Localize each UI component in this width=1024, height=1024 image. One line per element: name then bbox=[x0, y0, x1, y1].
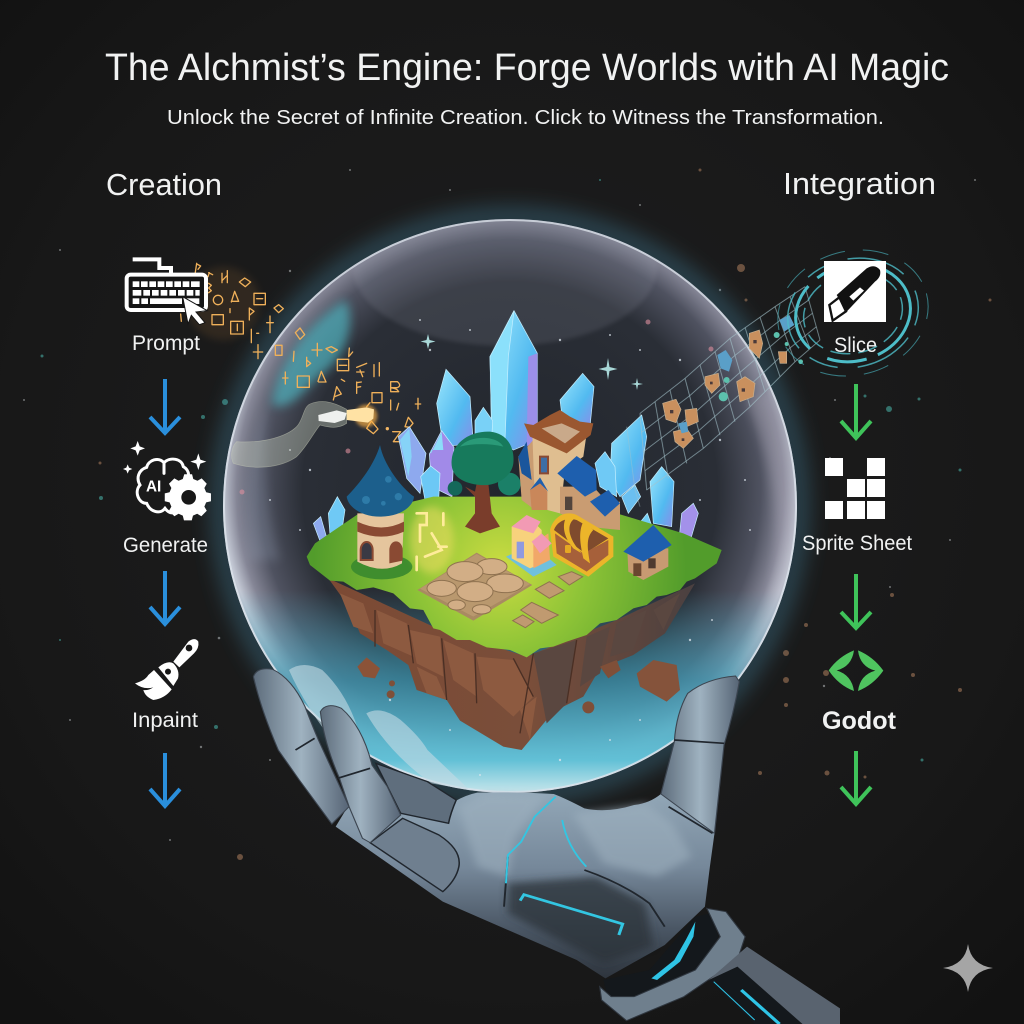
label: inpaint: Inpaint bbox=[132, 709, 198, 732]
icon: AI brain with gear: AI bbox=[146, 478, 161, 495]
icon: slice cutter bbox=[824, 261, 886, 322]
joint seams bbox=[295, 738, 724, 927]
far right crystals bbox=[639, 467, 698, 547]
wrist joint bbox=[604, 913, 718, 997]
cyan circuit lines bbox=[506, 797, 623, 935]
left edge crystals bbox=[313, 497, 353, 550]
castle bbox=[518, 410, 620, 530]
wrist ring bbox=[600, 908, 745, 1021]
arrow: inpaint onward bbox=[150, 753, 180, 806]
right rear crystal bbox=[560, 373, 594, 427]
crystals behind buildings bbox=[490, 311, 647, 497]
left column: creation flow bbox=[123, 259, 211, 806]
finger: lower segments bbox=[370, 763, 459, 892]
rune stream from keyboard to ghost hand bbox=[181, 263, 382, 434]
arrow: generate to inpaint bbox=[150, 571, 180, 624]
floating island bbox=[307, 311, 722, 750]
glass sphere bbox=[220, 190, 800, 800]
tree bbox=[448, 432, 521, 533]
portal rings bbox=[764, 233, 942, 393]
sphere interior effects bbox=[220, 190, 800, 800]
arrow: slice to sprite sheet bbox=[841, 384, 871, 438]
title: The Alchmist’s Engine: Forge Worlds with AI Magic bbox=[105, 47, 949, 89]
sphere outer glow bbox=[222, 218, 798, 794]
corner sparkle mark bbox=[943, 944, 993, 992]
palm bbox=[336, 767, 714, 978]
arrow: sprite sheet to godot bbox=[841, 574, 871, 628]
robotic hand bbox=[253, 665, 840, 1024]
pink house bbox=[506, 515, 557, 577]
cyan wrist glow bbox=[651, 922, 695, 980]
arrow: godot onward bbox=[841, 751, 871, 804]
background star dust bbox=[23, 168, 992, 860]
icon: sprite sheet grid bbox=[825, 458, 885, 519]
finger: second bbox=[320, 706, 401, 843]
palm highlight bbox=[458, 793, 692, 877]
left tall crystal bbox=[437, 369, 473, 447]
small blue house bbox=[623, 525, 672, 580]
sparkle stars bbox=[420, 334, 643, 390]
label: slice: Slice bbox=[834, 334, 877, 357]
glowing brush tip bbox=[347, 405, 377, 427]
sprite fragments bbox=[663, 315, 803, 448]
stepping stones bbox=[513, 572, 583, 628]
arrow: prompt to generate bbox=[150, 379, 180, 433]
rear translucent fingers bbox=[289, 665, 470, 790]
central tall crystal bbox=[490, 311, 537, 450]
right column: integration flow bbox=[764, 233, 942, 804]
label: godot: Godot bbox=[822, 707, 897, 735]
forearm cyan lights bbox=[714, 982, 780, 1024]
left cluster crystals bbox=[398, 427, 454, 507]
ghost hand painting runes bbox=[232, 401, 377, 467]
runes past the brush bbox=[386, 382, 421, 442]
heading: creation: Creation bbox=[106, 167, 222, 202]
palm shadow bbox=[508, 877, 653, 963]
label: prompt: Prompt bbox=[132, 332, 200, 355]
stone plaza bbox=[417, 553, 532, 621]
forearm dark channel bbox=[709, 967, 802, 1024]
magic sparks bbox=[410, 507, 453, 573]
finger: far left bbox=[253, 669, 349, 824]
treasure chest bbox=[550, 513, 613, 577]
icon: AI brain with gear bbox=[123, 441, 211, 520]
forearm bbox=[709, 947, 840, 1024]
icon: keyboard with cursor bbox=[127, 259, 207, 325]
right big crystal bbox=[595, 415, 647, 513]
thumb bbox=[661, 676, 739, 833]
label: sprite sheet: Sprite Sheet bbox=[802, 532, 912, 555]
grass top bbox=[307, 497, 722, 657]
subtitle: Unlock the Secret of Infinite Creation. Click to Witness the Transformation. bbox=[167, 106, 884, 129]
wireframe mesh stream bbox=[627, 287, 820, 507]
wizard tower bbox=[347, 445, 414, 579]
floating rocks bbox=[357, 657, 680, 713]
small rear crystal bbox=[475, 407, 493, 440]
rock underside bbox=[328, 578, 695, 750]
icon: godot bbox=[829, 650, 883, 691]
sphere body bbox=[223, 219, 797, 793]
label: generate: Generate bbox=[123, 534, 208, 557]
heading: integration: Integration bbox=[783, 166, 936, 201]
sphere rim bbox=[224, 220, 796, 792]
icon: paint brush bbox=[135, 639, 198, 700]
